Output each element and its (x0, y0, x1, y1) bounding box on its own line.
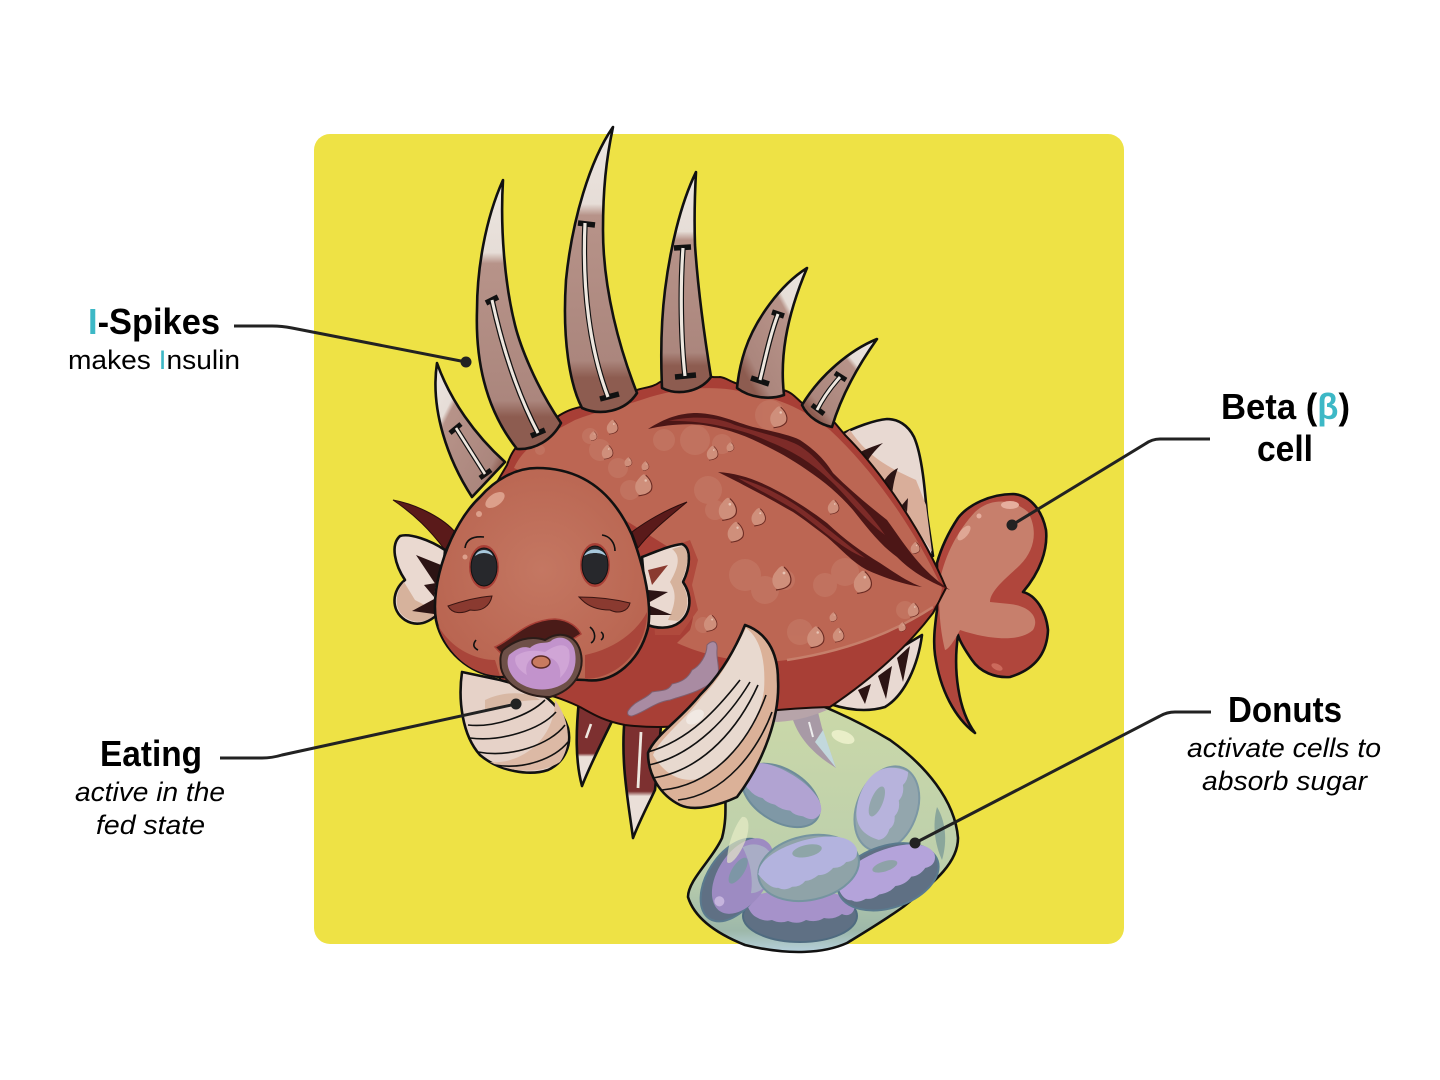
body (497, 376, 950, 727)
spike: lower left (577, 700, 615, 786)
label: Beta cell: cell (1257, 428, 1313, 469)
mouth (495, 619, 581, 665)
illustration: beta cell fish (393, 127, 1048, 952)
slash: upper (648, 413, 950, 590)
donut: upright right (842, 757, 931, 861)
head lower shade (438, 612, 647, 679)
mauve patch (772, 690, 827, 722)
head (435, 468, 649, 680)
head fin: right (632, 502, 698, 635)
fin: lower back (830, 635, 922, 710)
label: I-Spikes: makes Insulin (68, 345, 240, 375)
label: Donuts (1187, 689, 1381, 796)
moustache: left (448, 596, 492, 613)
glass bag with donuts (687, 688, 958, 952)
label: Donuts: activate cells to (1187, 733, 1381, 763)
label: Eating (75, 733, 225, 840)
inner spike (793, 712, 836, 768)
skin bumps (590, 406, 920, 648)
fin: upper back (838, 419, 933, 556)
eye: right (580, 535, 615, 587)
panel: yellow background (314, 134, 1124, 944)
label: Eating: active in the (75, 777, 225, 807)
spike: fourth (737, 268, 807, 398)
spike: tallest (565, 127, 637, 412)
spike: far left (435, 363, 505, 497)
skin blobs (535, 400, 914, 645)
slash: lower (718, 472, 922, 587)
bag (688, 688, 958, 952)
spike: second (477, 180, 561, 449)
leader line: Donuts (910, 712, 1211, 848)
moustache: right (579, 597, 630, 612)
label: Eating: Eating (100, 733, 202, 774)
fin: eating (lower left) (461, 672, 569, 773)
spike: fifth (802, 339, 877, 427)
donut: right front (829, 831, 947, 922)
pectoral fin (648, 625, 778, 808)
bag highlights (727, 817, 748, 863)
label: I-Spikes: I-Spikes (88, 301, 220, 342)
label: Beta cell: Beta (β) (1221, 386, 1350, 427)
spike: third (661, 172, 711, 392)
donut: back centre (731, 751, 831, 840)
tail light centre (939, 502, 1035, 650)
label: Beta cell (1221, 386, 1350, 469)
head highlights (483, 489, 507, 511)
donut: centre front (752, 826, 865, 910)
leader line: Eating (220, 698, 522, 758)
label: Donuts: absorb sugar (1202, 766, 1368, 796)
body upper skin (514, 388, 942, 662)
label: I-Spikes (68, 301, 240, 375)
leader line: I-Spikes (234, 326, 472, 368)
body lighter rim (787, 607, 933, 660)
tail (934, 494, 1048, 733)
eye: left (465, 537, 499, 589)
label: Eating: fed state (96, 810, 205, 840)
donut: bottom centre (743, 889, 857, 942)
donut: left (687, 823, 787, 935)
ribbon (628, 642, 718, 716)
leader line: Beta cell (1006, 439, 1210, 530)
spike: lower centre (623, 715, 662, 838)
label: Donuts: Donuts (1228, 689, 1342, 730)
donut: in mouth (500, 635, 582, 697)
head fin: left (393, 500, 455, 624)
